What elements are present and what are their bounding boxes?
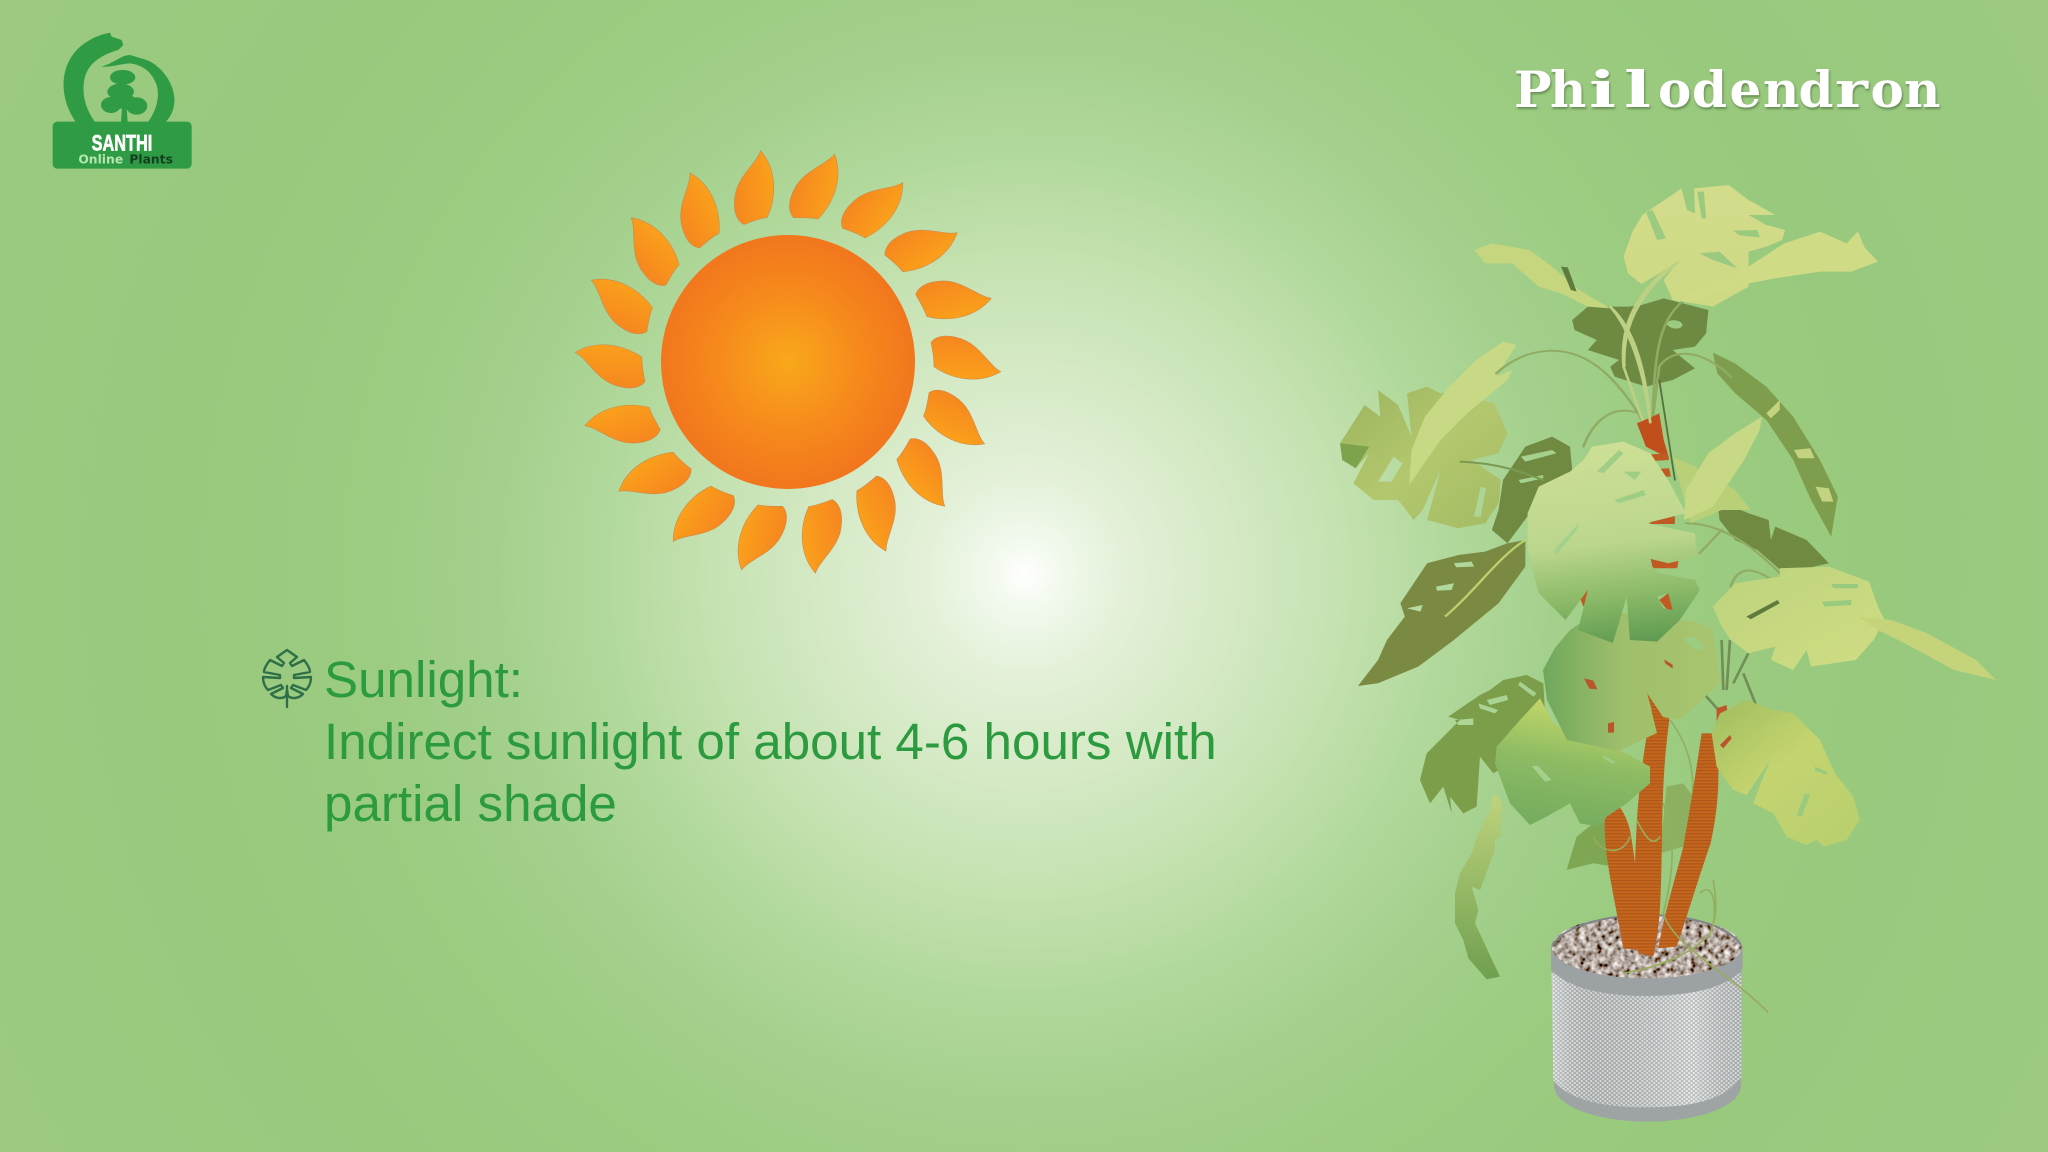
text block: sunlight care: partial shade	[324, 775, 617, 832]
logo badge	[53, 122, 192, 169]
red stem junction at right trunk	[1717, 705, 1728, 722]
trunk glimpses in leaf holes	[1584, 659, 1673, 733]
pale back leaf right of stem	[1673, 457, 1751, 523]
top pale leaf	[1624, 185, 1785, 307]
title: Ph	[1514, 60, 1586, 119]
sun disc	[661, 235, 915, 489]
right long leaf pale patches	[1766, 400, 1833, 502]
right mid leaf dark slits	[1746, 600, 1780, 619]
pale overlapping leaf	[1409, 342, 1516, 485]
logo: Santhi Online Plants	[53, 33, 192, 169]
pot rim band	[1551, 945, 1743, 996]
title: i	[1589, 60, 1616, 119]
dark leaf behind center	[1492, 437, 1572, 543]
pot body with base band	[1553, 950, 1742, 1122]
logo ring brush stroke	[64, 33, 174, 127]
left dark monstera leaf	[1420, 675, 1547, 813]
logo wordmark SANTHI: SANTHI	[92, 131, 152, 156]
trunk glimpse right leaf	[1720, 735, 1732, 748]
top stems	[1610, 262, 1679, 423]
icon: monstera leaf bullet	[263, 650, 311, 707]
left olive leaf	[1340, 387, 1507, 528]
pot soil	[1552, 915, 1742, 978]
lower plant above pot	[1420, 610, 1860, 1013]
upper left narrow leaf	[1474, 243, 1610, 308]
midrib lower left leaf	[1445, 540, 1525, 617]
text block: sunlight care: Indirect sunlight of about 4-6 hours with	[324, 713, 1217, 770]
upper front foliage	[1474, 185, 1996, 680]
title: l	[1624, 60, 1651, 119]
title: r	[1835, 60, 1869, 119]
right long leaf	[1713, 353, 1838, 537]
logo tagline: Plants	[129, 152, 173, 166]
moss pole rings	[1577, 453, 1679, 617]
illustration: potted philodendron	[1340, 185, 1996, 1122]
upper left leaf dark slit	[1561, 267, 1577, 292]
tail leaf	[1858, 617, 1996, 680]
dark leaf behind trunks left	[1567, 820, 1613, 870]
trailing vine over pot	[1593, 820, 1768, 1013]
title: odend	[1658, 60, 1833, 119]
dark right lower leaf	[1717, 500, 1829, 573]
big central leaf lower part	[1543, 610, 1720, 752]
central large leaf	[1528, 442, 1700, 643]
red stem top	[1637, 413, 1669, 458]
logo tagline: Online	[78, 152, 123, 166]
pale green lower leaf	[1495, 698, 1650, 827]
upper back foliage	[1340, 262, 1838, 686]
right mid pale leaf	[1713, 567, 1885, 670]
pot perforated mesh	[1552, 973, 1742, 1107]
sun rays	[574, 147, 1002, 577]
title: on	[1870, 60, 1940, 119]
dark leaf behind trunks right	[1660, 783, 1693, 853]
top right leaf	[1677, 232, 1878, 302]
pot inner rim	[1552, 915, 1741, 945]
dark lower left leaf	[1358, 540, 1525, 686]
dark center leaf	[1572, 298, 1708, 387]
grey-green petioles	[1705, 640, 1757, 712]
pale small right leaf	[1684, 417, 1762, 520]
moss trunks	[1600, 692, 1718, 957]
icon: sun	[574, 147, 1002, 577]
right lower leaf	[1712, 700, 1860, 847]
stems	[1461, 262, 1784, 590]
text block: sunlight care: Sunlight:	[324, 651, 523, 708]
stems down to pot	[1663, 720, 1715, 923]
left leaf shaded lobe	[1340, 443, 1369, 468]
pot	[1551, 915, 1743, 1122]
logo tree	[101, 70, 147, 127]
hanging left leaf	[1455, 793, 1502, 979]
pot mesh shading	[1552, 973, 1742, 1107]
